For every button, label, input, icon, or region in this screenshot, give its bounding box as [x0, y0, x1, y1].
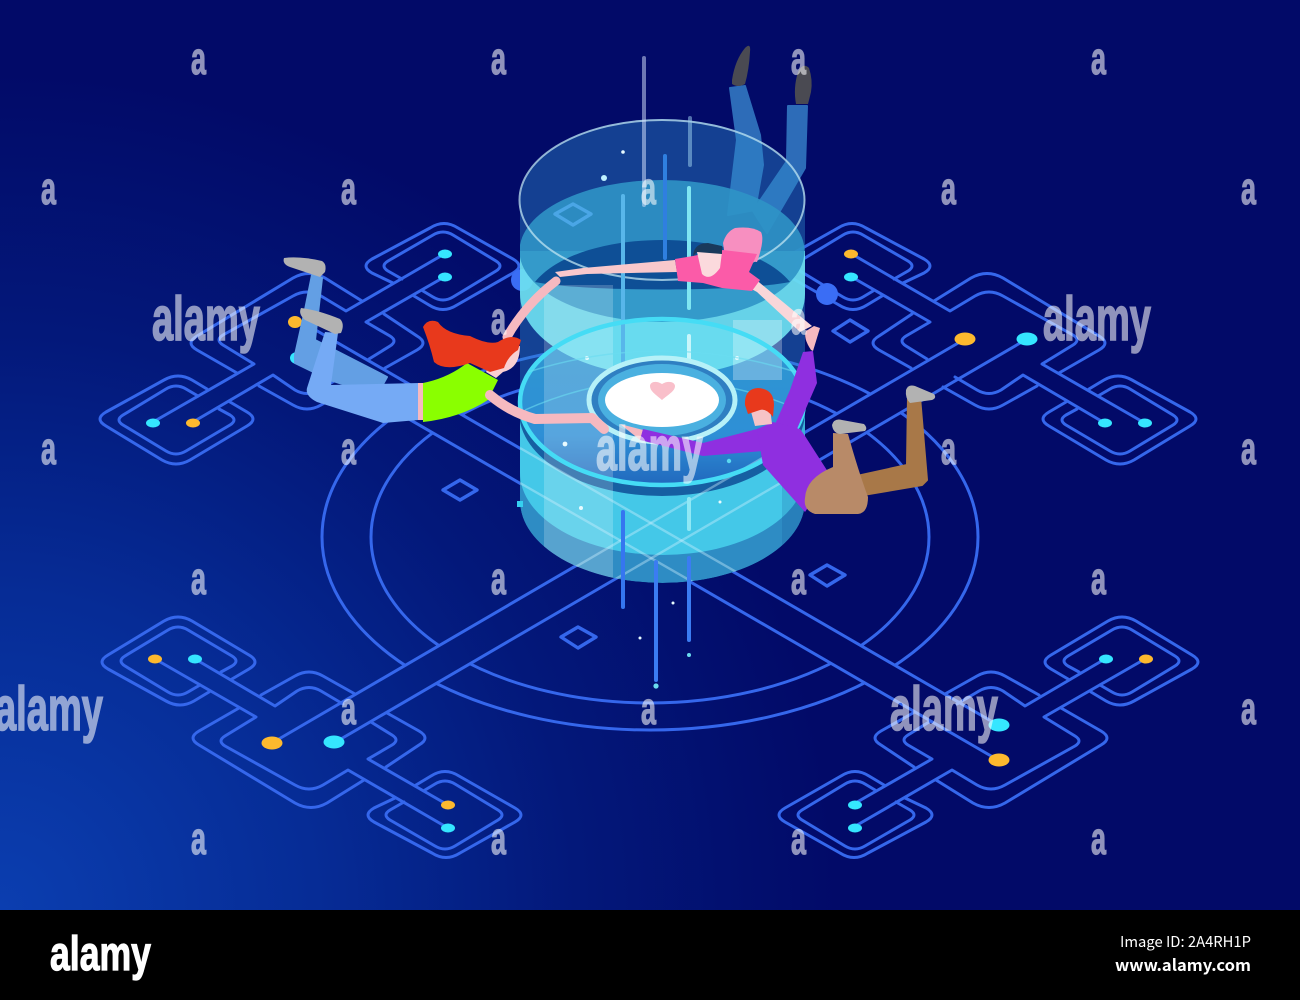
watermark grid: a [1241, 163, 1257, 214]
person: man in pink [555, 228, 812, 332]
circuit motif: top left [100, 224, 519, 464]
watermark grid: a [191, 813, 207, 864]
watermark grid: a [1091, 33, 1107, 84]
diamond inside cylinder [555, 204, 591, 225]
watermark grid: a [491, 813, 507, 864]
watermark grid: a [341, 163, 357, 214]
watermark grid: a [191, 33, 207, 84]
lower cylinder bright band [520, 402, 805, 555]
watermark grid: a [41, 163, 57, 214]
light vertical panels [544, 285, 613, 585]
watermark grid: a [1091, 813, 1107, 864]
circuit motif: bottom right [779, 617, 1198, 858]
watermark grid: alamy [0, 675, 103, 744]
upper disc top [520, 180, 804, 322]
glass top rim [520, 120, 804, 280]
glowing ring [520, 319, 804, 485]
ring floor [519, 318, 805, 486]
watermark grid: a [791, 813, 807, 864]
icon: heart [650, 382, 675, 400]
watermark grid: a [1241, 423, 1257, 474]
inner ring arcs [525, 351, 800, 410]
watermark grid: a [791, 33, 807, 84]
watermark grid: alamy [1043, 285, 1151, 354]
long diagonal connector lines [272, 321, 1027, 760]
watermark grid: a [1241, 683, 1257, 734]
concentric floor rings [322, 344, 978, 730]
watermark grid: a [1091, 553, 1107, 604]
target with heart [589, 358, 735, 442]
small floor diamonds [443, 320, 868, 648]
blue junction dots [511, 269, 838, 305]
watermark grid: a [491, 553, 507, 604]
lines seen through the lower body [520, 447, 780, 582]
watermark grid: a [941, 163, 957, 214]
person: man in purple [620, 326, 935, 514]
circuit motif: top right [777, 224, 1196, 464]
watermark grid: a [641, 163, 657, 214]
watermark grid: a [791, 553, 807, 604]
website: www.alamy.com [1115, 952, 1251, 976]
watermark grid: a [41, 423, 57, 474]
watermark grid: a [941, 423, 957, 474]
watermark grid: a [491, 293, 507, 344]
logo: alamy [50, 928, 151, 981]
upper disc side [520, 251, 805, 376]
circuit motif: bottom left [102, 617, 521, 858]
image id: Image ID: 2A4RH1P [1120, 931, 1251, 952]
person: red-haired woman in green [284, 257, 604, 429]
disc hole [535, 240, 790, 290]
band under the ring [520, 414, 805, 496]
footer bar [0, 910, 1300, 1000]
watermark grid: alamy [152, 285, 260, 354]
watermark grid: a [341, 423, 357, 474]
diagonal channels [272, 321, 1027, 760]
glass cylinder [520, 119, 805, 583]
watermark grid: a [641, 683, 657, 734]
watermark grid: alamy [596, 415, 703, 484]
watermark grid: a [791, 293, 807, 344]
floating sparkles [517, 150, 739, 689]
vertical light beams [623, 58, 690, 680]
lower cylinder body [520, 474, 804, 583]
watermark grid: a [341, 683, 357, 734]
watermark grid: a [491, 33, 507, 84]
node dots [146, 250, 1153, 832]
watermark grid: a [191, 553, 207, 604]
pink person legs behind the glass [728, 46, 812, 233]
glass back wall [518, 118, 808, 408]
watermark grid: alamy [890, 675, 998, 744]
